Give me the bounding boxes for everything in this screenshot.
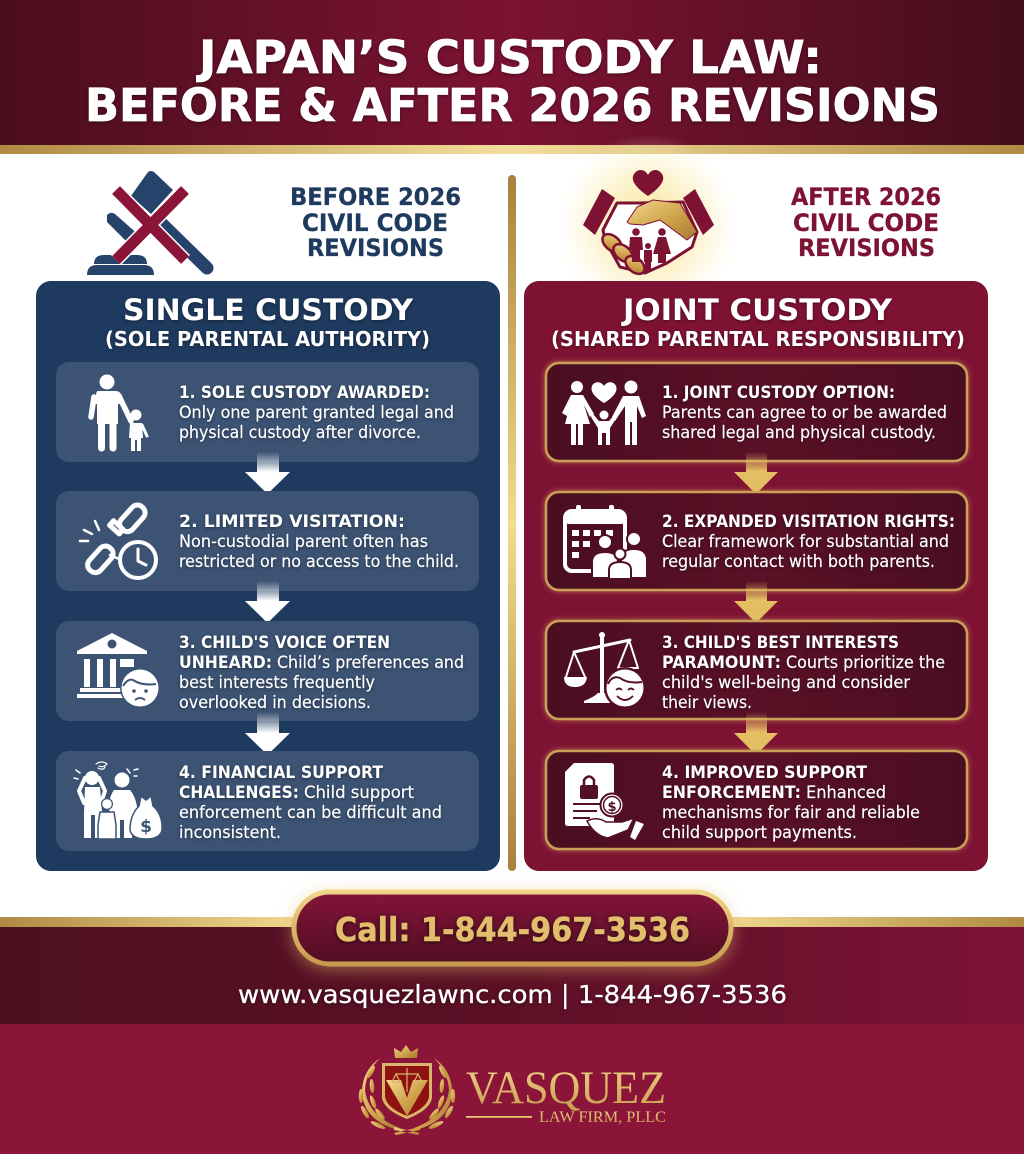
- heading: before 2026: CIVIL CODE: [302, 209, 448, 237]
- icon: gavel crossed out: [87, 171, 207, 275]
- arrow 3 right: [734, 712, 778, 755]
- center divider: [508, 175, 516, 871]
- icon: stressed family and money bag: [74, 762, 162, 839]
- text: right card 1: [662, 383, 947, 443]
- icon: parent and child: [91, 374, 147, 451]
- text: card 2: restricted or no access to the child.: [179, 552, 459, 572]
- logo: Vasquez Law Firm: [359, 1045, 666, 1135]
- heading: before 2026: [290, 183, 461, 262]
- panel heading: joint custody: (SHARED PARENTAL RESPONSIBILITY): [551, 327, 965, 351]
- call to action pill: [294, 892, 731, 964]
- text: card 4: Child support: [304, 783, 414, 803]
- icon: calendar with family: [565, 505, 647, 579]
- text: right card 1: Parents can agree to or be awarded: [662, 403, 947, 423]
- header banner: [0, 0, 1024, 154]
- card 1: joint custody option: [546, 363, 967, 461]
- text: card 3: UNHEARD:: [179, 653, 272, 673]
- text: card 4: [179, 763, 442, 843]
- panel heading: single custody: SINGLE CUSTODY: [123, 293, 414, 327]
- text: right card 2: [662, 512, 955, 572]
- text: right card 3: Courts prioritize the: [786, 653, 945, 673]
- text: card 4: inconsistent.: [179, 823, 281, 843]
- icon: document, lock, coin and hand: $: [607, 800, 617, 815]
- text: right card 4: Enhanced: [806, 783, 886, 803]
- text: card 4: 4. FINANCIAL SUPPORT: [179, 763, 383, 783]
- logo crown: [394, 1045, 418, 1058]
- icon: handshake with family: [583, 170, 714, 277]
- text: right card 4: 4. IMPROVED SUPPORT: [662, 763, 867, 783]
- heading: after 2026: REVISIONS: [798, 234, 935, 262]
- text: right card 2: Clear framework for substantial and: [662, 532, 949, 552]
- logo wordmark: VASQUEZ: [466, 1062, 666, 1114]
- panel heading: single custody: [105, 293, 430, 351]
- heading: after 2026: CIVIL CODE: [793, 209, 939, 237]
- arrow 2 right: [734, 581, 778, 623]
- text: right card 1: shared legal and physical custody.: [662, 423, 936, 443]
- text: card 3: overlooked in decisions.: [179, 693, 371, 713]
- icon: stressed family and money bag: $: [140, 817, 152, 837]
- card 4: improved support enforcement: [546, 751, 967, 849]
- card 1: sole custody awarded: [56, 362, 479, 462]
- text: right card 4: [662, 763, 920, 843]
- text: card 1: 1. SOLE CUSTODY AWARDED:: [179, 383, 430, 403]
- text: card 2: Non-custodial parent often has: [179, 532, 428, 552]
- text: card 4: enforcement can be difficult and: [179, 803, 442, 823]
- icon: scales and smiling child: [564, 632, 646, 709]
- website and phone: www.vasquezlawnc.com | 1-844-967-3536: [238, 980, 787, 1009]
- text: card 3: best interests frequently: [179, 673, 375, 693]
- text: right card 4: child support payments.: [662, 823, 857, 843]
- arrow 2 left: [245, 581, 290, 623]
- card 3: child's voice often unheard: [56, 621, 479, 721]
- icon: broken chain and clock: [80, 502, 156, 578]
- text: right card 1: 1. JOINT CUSTODY OPTION:: [662, 383, 895, 403]
- icon: document, lock, coin and hand: [565, 763, 644, 840]
- text: card 1: [179, 383, 454, 443]
- logo wordmark: LAW FIRM, PLLC: [539, 1109, 666, 1126]
- panel: joint custody: [524, 281, 988, 871]
- heading: after 2026: AFTER 2026: [791, 183, 941, 211]
- arrow 1 left: [245, 452, 290, 494]
- text: right card 3: child's well-being and consider: [662, 673, 910, 693]
- text: right card 3: [662, 633, 945, 713]
- panel heading: joint custody: [551, 293, 965, 351]
- heading: before 2026: BEFORE 2026: [290, 183, 461, 211]
- logo wreath: [359, 1058, 455, 1135]
- call to action pill: Call: 1-844-967-3536: [335, 910, 690, 949]
- title: JAPAN’S CUSTODY LAW:: [196, 31, 822, 84]
- text: card 3: [179, 633, 464, 713]
- logo shield: [382, 1063, 432, 1119]
- footer contact band: [0, 892, 1024, 1024]
- text: right card 4: ENFORCEMENT:: [662, 783, 801, 803]
- icon: family with heart: [562, 380, 646, 445]
- text: card 3: Child’s preferences and: [277, 653, 464, 673]
- text: right card 3: their views.: [662, 693, 752, 713]
- card 4: financial support challenges: [56, 751, 479, 851]
- icon glow behind handshake: [556, 134, 740, 318]
- card 3: child's best interests paramount: [546, 621, 967, 719]
- title: [85, 31, 940, 132]
- text: right card 2: regular contact with both parents.: [662, 552, 935, 572]
- logo band: [0, 1024, 1024, 1154]
- text: right card 2: 2. EXPANDED VISITATION RIGHTS:: [662, 512, 955, 532]
- text: right card 3: PARAMOUNT:: [662, 653, 781, 673]
- panel heading: joint custody: JOINT CUSTODY: [621, 293, 893, 327]
- text: card 2: [179, 512, 459, 572]
- text: card 1: physical custody after divorce.: [179, 423, 421, 443]
- panel: single custody: [36, 281, 500, 871]
- text: card 1: Only one parent granted legal and: [179, 403, 454, 423]
- card 2: expanded visitation rights: [546, 492, 967, 590]
- card 2: limited visitation: [56, 491, 479, 591]
- arrow 1 right: [734, 452, 778, 494]
- panel heading: single custody: (SOLE PARENTAL AUTHORITY): [105, 327, 430, 351]
- text: card 4: CHALLENGES:: [179, 783, 299, 803]
- text: card 2: 2. LIMITED VISITATION:: [179, 512, 405, 532]
- title: BEFORE & AFTER 2026 REVISIONS: [85, 79, 940, 132]
- text: right card 3: 3. CHILD'S BEST INTERESTS: [662, 633, 899, 653]
- heading: after 2026: [791, 183, 941, 262]
- text: card 3: 3. CHILD'S VOICE OFTEN: [179, 633, 390, 653]
- icon: courthouse and sad child: [77, 633, 160, 708]
- text: right card 4: mechanisms for fair and reliable: [662, 803, 920, 823]
- arrow 3 left: [245, 712, 290, 755]
- heading: before 2026: REVISIONS: [307, 234, 444, 262]
